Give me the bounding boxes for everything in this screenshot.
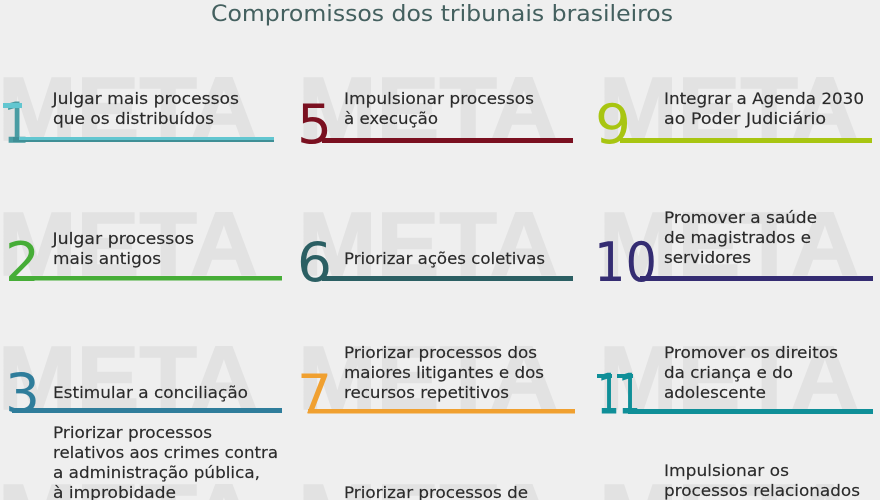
panel: meta 5: META [298, 60, 558, 160]
panel: meta 7: maiores litigantes e dos [344, 363, 544, 382]
panel: meta 10: servidores [664, 248, 751, 267]
panel: meta 2: META [0, 195, 258, 295]
panel: meta 10: de magistrados e [664, 228, 811, 247]
panel: meta 1: Julgar mais processos [51, 89, 239, 108]
panel: meta 9: Integrar a Agenda 2030 [664, 89, 864, 108]
panel: meta 3: Estimular a conciliação [53, 383, 248, 402]
panel: meta 2: mais antigos [53, 249, 161, 268]
panel: meta 6: Priorizar ações coletivas [344, 249, 545, 268]
panel: meta 11: Promover os direitos [664, 343, 838, 362]
panel: meta 5: Impulsionar processos [344, 89, 534, 108]
panel: meta 5: 5 [297, 93, 332, 156]
panel: meta 7: META [298, 329, 558, 429]
panel: meta 7: 7 [297, 363, 332, 426]
panel: meta 11: 11 [598, 363, 640, 426]
title: Compromissos dos tribunais brasileiros [211, 2, 673, 27]
panel: meta 9: 9 [595, 93, 631, 156]
panel: meta 6: META [298, 195, 558, 295]
panel: meta 4: relativos aos crimes contra [53, 443, 278, 462]
panel: meta 2: Julgar processos [51, 229, 194, 248]
panel: meta 1: que os distribuídos [53, 109, 214, 128]
panel: meta 3: META [0, 329, 258, 429]
panel: meta 10: META [599, 195, 859, 295]
panel: meta 4: a administração pública, [53, 463, 260, 482]
panel: meta 12: Impulsionar os [664, 461, 789, 480]
panel: meta 5: à execução [344, 109, 438, 128]
panel: meta 10: Promover a saúde [664, 208, 817, 227]
panel: meta 3: 3 [5, 362, 40, 425]
panel: meta 11: da criança e do [664, 363, 793, 382]
panel: meta 11: adolescente [664, 383, 766, 402]
panel: meta 2: 2 [5, 231, 40, 294]
panel: meta 7: Priorizar processos dos [344, 343, 537, 362]
panel: meta 9: META [599, 60, 859, 160]
panel: meta 1: META [0, 60, 258, 160]
panel: meta 11: META [599, 329, 859, 429]
panel: meta 7: recursos repetitivos [344, 383, 509, 402]
panel: meta 1: 1 [4, 92, 28, 155]
panel: meta 9: ao Poder Judiciário [664, 109, 826, 128]
panel: meta 10: 10 [594, 231, 657, 294]
panel: meta 12: processos relacionados [664, 481, 860, 500]
panel: meta 4 [0, 423, 278, 500]
panel: meta 4: Priorizar processos [53, 423, 212, 442]
panel: meta 6: 6 [297, 231, 332, 294]
